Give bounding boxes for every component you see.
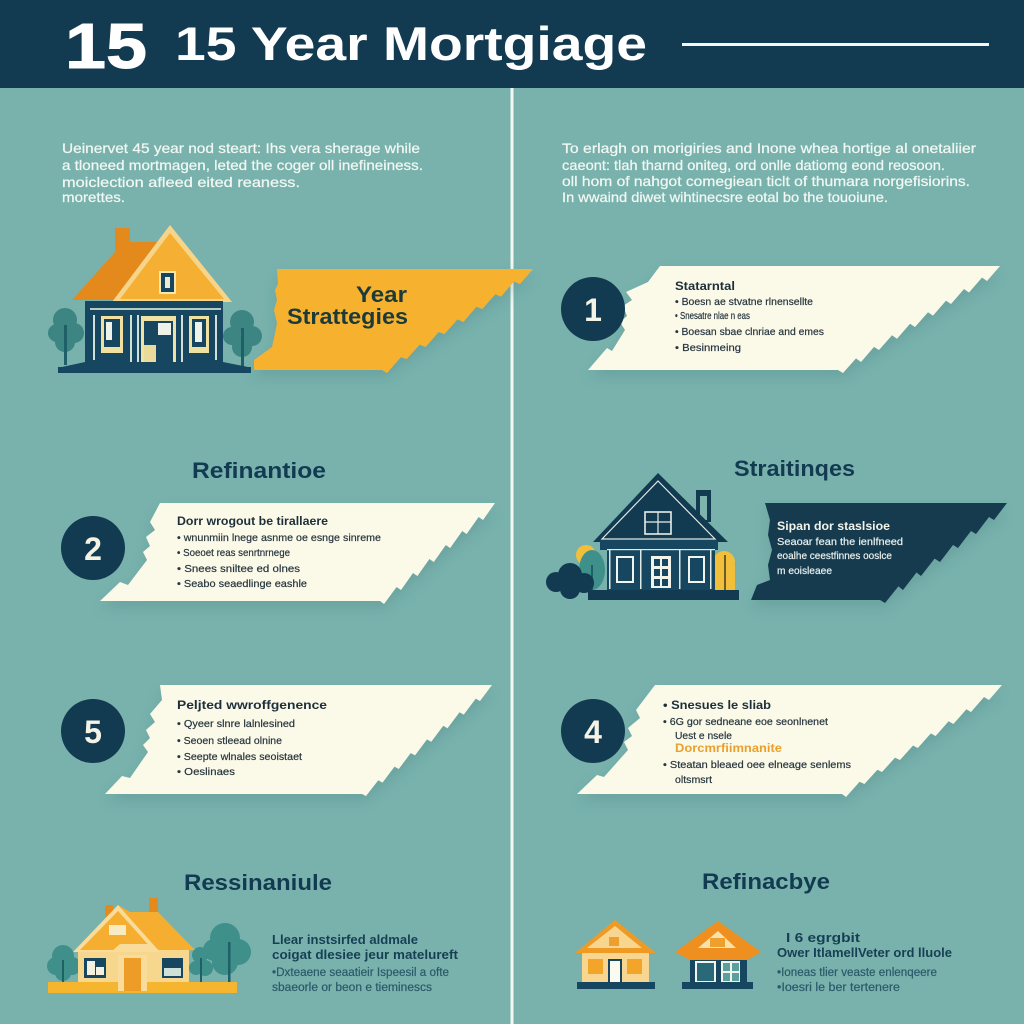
card 2 text (177, 514, 381, 590)
text block bottom right: •Ioesri le ber tertenere (777, 982, 900, 994)
number badge 5: 5 (84, 714, 102, 750)
icon: yellow house with trees (47, 898, 251, 993)
intro text left: morettes. (62, 189, 125, 205)
card 3 text: Peljted wwroffgenence (177, 698, 327, 712)
card 2 text: • wnunmiin lnege asnme oe esnge sinreme (177, 532, 381, 544)
heading bottom left: Ressinaniule (184, 870, 332, 895)
card 1 text: • Besinmeing (675, 342, 741, 354)
text block bottom left: Llear instsirfed aldmale (272, 932, 418, 947)
header rule (682, 43, 989, 46)
card 1 text: • Boesn ae stvatne rlnensellte (675, 296, 813, 308)
card 3 text: • Oeslinaes (177, 766, 235, 778)
card 4 text: • Snesues le sliab (663, 698, 771, 712)
heading bottom right: Refinacbye (702, 869, 830, 894)
banner label: Year (356, 282, 407, 307)
number badge 2: 2 (84, 531, 102, 567)
intro text right (562, 140, 976, 205)
panel: card 3 (61, 685, 492, 796)
banner label (287, 282, 408, 329)
card 3 text: • Seepte wlnales seoistaet (177, 751, 302, 763)
card 4 text: Dorcmrfiimnanite (675, 743, 782, 755)
panel: card 2 (61, 503, 495, 604)
card 3 text (177, 698, 327, 778)
card 4 text: • 6G gor sedneane eoe seonlnenet (663, 716, 828, 728)
banner label: Strattegies (287, 304, 408, 329)
intro text right: caeont: tlah tharnd oniteg, ord onlle datiomg eond reosoon. (562, 157, 945, 173)
icon: two small houses (575, 920, 761, 989)
number badge 4 (561, 699, 625, 763)
intro text left (62, 140, 423, 205)
number badge 2 (61, 516, 125, 580)
text block bottom left: sbaeorle or beon e tieminescs (272, 982, 432, 994)
number badge 5 (61, 699, 125, 763)
panel: dark card (751, 503, 1007, 603)
card 3 text: • Seoen stleead olnine (177, 735, 282, 747)
intro text right: To erlagh on morigiries and Inone whea hortige al onetaliier (562, 140, 976, 156)
card 2 text: • Soeoet reas senrtnrnege (177, 547, 290, 559)
intro text left: moiclection afleed eited reaness. (62, 174, 300, 190)
number badge 4: 4 (584, 714, 602, 750)
card 4 text: oltsmsrt (675, 774, 712, 786)
divider between columns (510, 88, 514, 1024)
icon: orange house with trees (48, 225, 262, 373)
card 4 text: • Steatan bleaed oee elneage senlems (663, 759, 851, 771)
icon: dark house with trees (546, 473, 739, 600)
intro text right: oll hom of nahgot comegiean ticlt of thumara norgefisiorins. (562, 173, 970, 189)
header banner (0, 0, 1024, 88)
card 2 text: Dorr wrogout be tirallaere (177, 514, 328, 528)
panel: card 1 (561, 266, 1000, 373)
heading left middle: Refinantioe (192, 458, 326, 483)
card 3 text: • Qyeer slnre lalnlesined (177, 718, 295, 730)
heading right middle: Straitinqes (734, 456, 855, 481)
text block bottom right (777, 930, 952, 994)
dark card text: Seaoar fean the ienlfneed (777, 536, 903, 548)
number badge 1: 1 (584, 292, 602, 328)
text block bottom left: coigat dlesiee jeur matelureft (272, 947, 459, 962)
number badge 1 (561, 277, 625, 341)
title: 15 Year Mortgiage (175, 17, 647, 70)
dark card text (777, 519, 903, 577)
intro text right: In wwaind diwet wihtinecsre eotal bo the touoiune. (562, 189, 888, 205)
text block bottom right: •Ioneas tlier veaste enlenqeere (777, 967, 937, 979)
panel: card 4 (561, 685, 1002, 797)
text block bottom right: Ower ItlamellVeter ord lluole (777, 945, 952, 960)
card 2 text: • Seabo seaedlinge eashle (177, 578, 307, 590)
card 1 text (675, 279, 824, 354)
intro text left: Ueinervet 45 year nod steart: Ihs vera sherage while (62, 140, 420, 156)
card 1 text: • Snesatre nlae n eas (675, 310, 750, 322)
text block bottom left (272, 932, 459, 994)
card 4 text (663, 698, 851, 786)
text block bottom left: •Dxteaene seaatieir Ispeesil a ofte (272, 967, 449, 979)
dark card text: eoalhe ceestfinnes ooslce (777, 550, 892, 562)
card 2 text: • Snees sniltee ed olnes (177, 563, 300, 575)
text block bottom right: I 6 egrgbit (786, 930, 861, 945)
card 1 text: • Boesan sbae clnriae and emes (675, 326, 824, 338)
intro text left: a tloneed mortmagen, leted the coger oll inefineiness. (62, 157, 423, 173)
panel: yellow Year Strategies banner (254, 269, 533, 373)
dark card text: Sipan dor staslsioe (777, 519, 890, 533)
card 4 text: Uest e nsele (675, 730, 732, 742)
card 1 text: Statarntal (675, 279, 735, 293)
dark card text: m eoisleaee (777, 565, 832, 577)
big number 15: 15 (65, 10, 147, 82)
